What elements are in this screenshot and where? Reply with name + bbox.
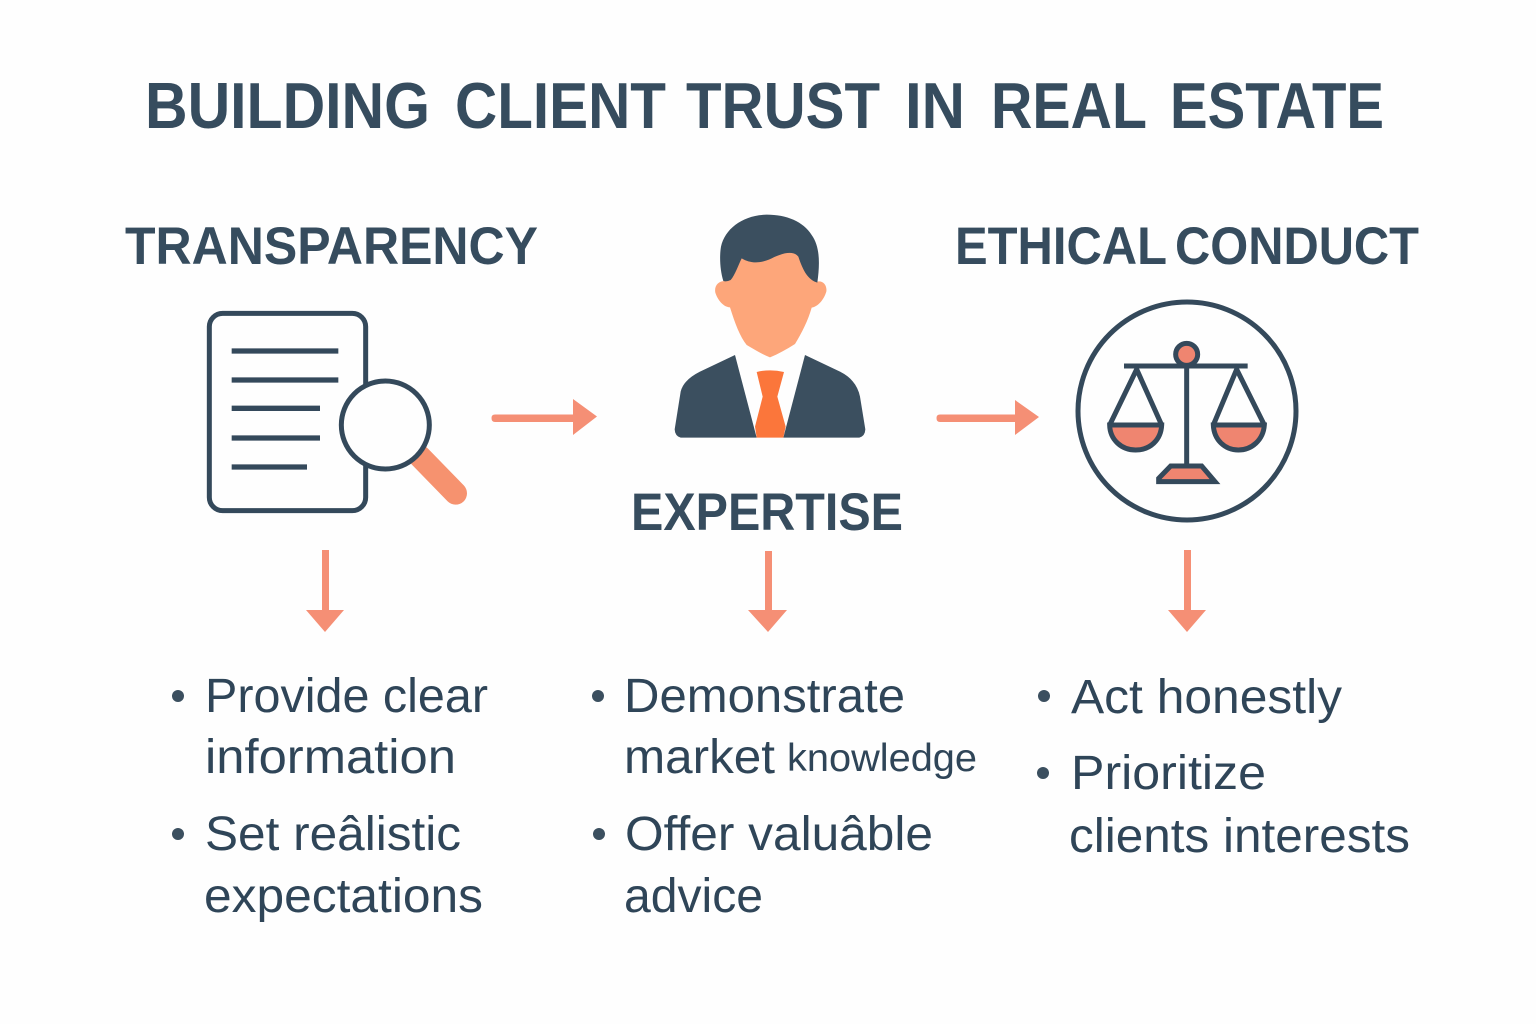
bullet list: transparency: Set reâlistic xyxy=(205,808,461,861)
heading: ethical conduct: ETHICAL xyxy=(955,217,1167,276)
heading: ethical conduct: CONDUCT xyxy=(1175,217,1419,276)
bullet list: ethical conduct: Act honestly xyxy=(1071,671,1342,724)
title: IN xyxy=(905,69,965,142)
title: BUILDING xyxy=(145,69,430,142)
arrow: transparency to expertise xyxy=(492,399,597,435)
bullet list: transparency: information xyxy=(205,731,456,784)
icon: balance scales in circle xyxy=(1078,302,1296,520)
title: CLIENT xyxy=(455,69,666,142)
heading: ethical conduct xyxy=(955,217,1419,276)
icon: business person xyxy=(675,215,865,438)
title: TRUST xyxy=(686,69,880,142)
arrow: ethical conduct down xyxy=(1168,550,1206,632)
bullet list: transparency: Provide clear xyxy=(205,670,488,723)
heading: expertise: EXPERTISE xyxy=(631,483,903,542)
title: ESTATE xyxy=(1170,69,1384,142)
arrow: transparency down xyxy=(306,550,344,632)
bullet list: transparency: expectations xyxy=(204,870,483,923)
title xyxy=(145,69,1384,142)
bullet list: ethical conduct xyxy=(1037,671,1410,863)
icon: document with magnifying glass xyxy=(209,313,456,511)
bullet list: transparency xyxy=(172,670,488,923)
arrow: expertise to ethical conduct xyxy=(936,400,1039,435)
bullet list: ethical conduct: Prioritize xyxy=(1071,747,1266,800)
bullet list: expertise: Offer valuâble xyxy=(625,808,933,861)
heading: transparency: TRANSPARENCY xyxy=(125,217,538,276)
bullet list: expertise: market xyxy=(624,731,775,784)
bullet list: ethical conduct: clients interests xyxy=(1069,810,1410,863)
bullet list: expertise: Demonstrate xyxy=(624,670,905,723)
arrow: expertise down xyxy=(748,551,787,632)
bullet list: expertise: advice xyxy=(624,870,763,923)
title: REAL xyxy=(991,69,1147,142)
bullet list: expertise xyxy=(592,670,977,923)
bullet list: expertise: knowledge xyxy=(787,737,977,780)
